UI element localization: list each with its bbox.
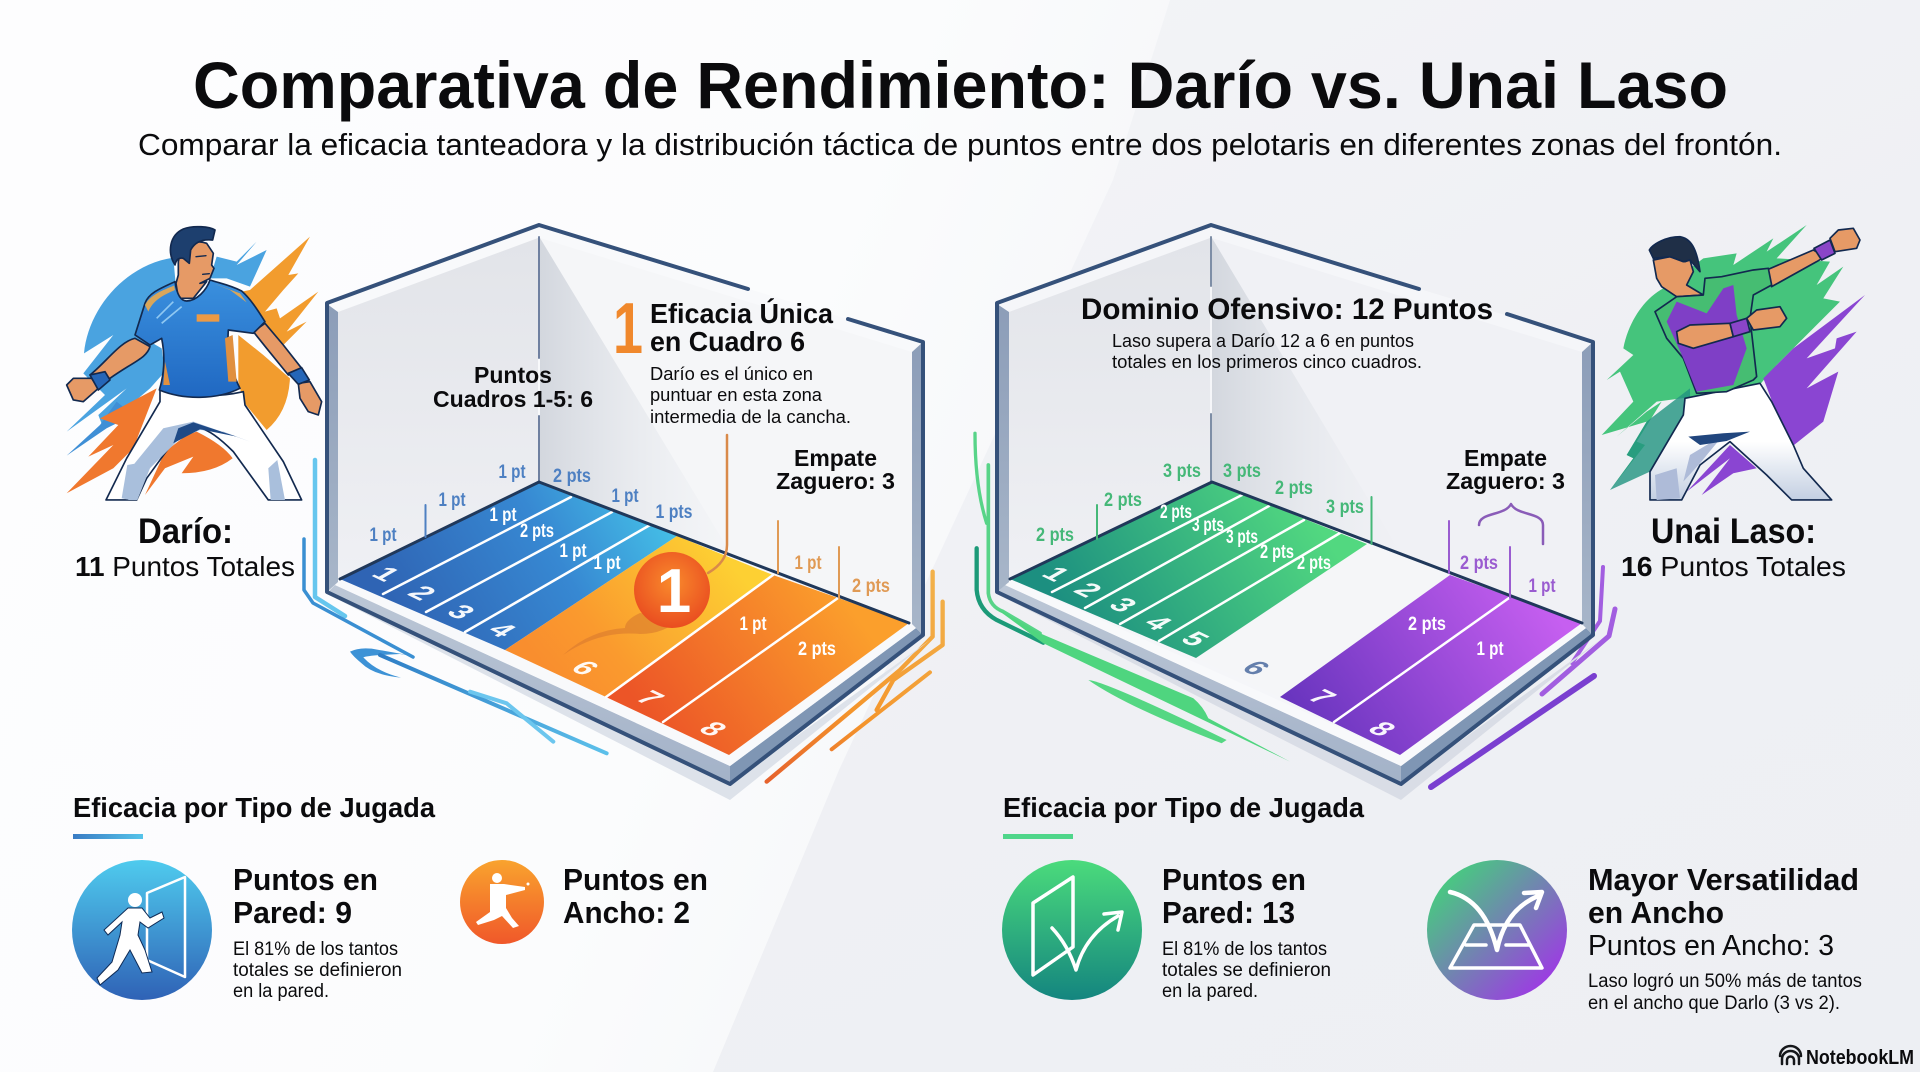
point labels on floor [1160, 502, 1504, 660]
stat: puntos en pared: El 81% de los tantos [1162, 939, 1327, 960]
icon: pared Darío [72, 860, 212, 1000]
floor numbers: 6 [1234, 657, 1277, 680]
stat: mayor versatilidad: Laso logró un 50% más de tantos [1588, 971, 1862, 992]
callout: eficacia unica: Darío es el único en [650, 364, 813, 384]
icon: versatilidad [1427, 860, 1567, 1000]
section: eficacia Laso [1002, 792, 1862, 1014]
point labels on wall: 1 pt [438, 490, 466, 511]
floor numbers: 6 [563, 657, 606, 680]
point labels on wall: 1 pt [498, 462, 526, 483]
callout: dominio ofensivo: Dominio Ofensivo: 12 Puntos [1081, 293, 1493, 326]
stat: puntos en pared: totales se definieron [1162, 960, 1331, 981]
point labels on floor: 2 pts [1260, 542, 1294, 563]
decorative speed strokes: Laso court [975, 433, 1615, 787]
court: Darío [327, 225, 930, 800]
ball: cuadro 6: 1 [657, 557, 691, 626]
floor: Darío [340, 482, 909, 755]
callout: puntos cuadros 1-5 [433, 362, 593, 412]
point labels on wall: 2 pts [1460, 553, 1498, 574]
point labels on floor: 3 pts [1226, 527, 1258, 548]
point labels on floor [490, 505, 836, 660]
floor numbers: 5 [1173, 628, 1216, 651]
icon: ancho Darío [460, 860, 544, 944]
point labels on wall: 2 pts [1036, 525, 1074, 546]
decorative speed strokes: Darío court [304, 460, 943, 782]
point labels on floor: 2 pts [520, 521, 554, 542]
icon: pared Laso [1002, 860, 1142, 1000]
point labels on floor: 1 pt [594, 553, 621, 574]
floor numbers [1034, 563, 1403, 741]
point labels on wall: 3 pts [1223, 461, 1261, 482]
callout: empate zaguero: Empate [794, 445, 877, 471]
point labels on wall: 3 pts [1163, 461, 1201, 482]
floor numbers: 8 [1360, 718, 1403, 741]
floor numbers: 3 [1101, 594, 1144, 617]
point labels on floor: 2 pts [1408, 614, 1446, 635]
name: Unai Laso: Unai Laso: [1651, 512, 1816, 551]
callout: empate zaguero [776, 445, 895, 494]
callout: eficacia unica: intermedia de la cancha. [650, 407, 851, 427]
athlete: Unai Laso [1602, 225, 1865, 500]
stat: puntos en pared: Puntos en [233, 862, 378, 897]
section: eficacia Darío: Eficacia por Tipo de Jugada [73, 792, 435, 823]
athlete: Darío [67, 227, 322, 500]
name: Darío [75, 512, 295, 582]
callout: eficacia unica: en Cuadro 6 [650, 326, 805, 357]
stat: puntos en pared: en la pared. [233, 981, 329, 1002]
callout: puntos cuadros 1-5: Puntos [474, 362, 552, 388]
floor numbers [364, 563, 734, 741]
stat: puntos en ancho [563, 862, 708, 930]
callout: empate zaguero [1446, 445, 1565, 544]
section: eficacia Laso: Eficacia por Tipo de Jugada [1003, 792, 1364, 823]
subtitle: Comparar la eficacia tanteadora y la distribución táctica de puntos entre dos pelotaris en diferentes zonas del frontón. [138, 127, 1782, 162]
point labels on wall [370, 462, 890, 598]
point labels on floor: 1 pt [490, 505, 517, 526]
name: Darío: 11 Puntos Totales [75, 551, 295, 582]
name: Unai Laso: 16 Puntos Totales [1621, 551, 1846, 582]
point labels on wall: 2 pts [1104, 490, 1142, 511]
floor numbers: 2 [1066, 579, 1109, 602]
name: Unai Laso [1621, 512, 1846, 582]
point labels on wall: 1 pts [656, 502, 692, 523]
callout: empate zaguero: Empate [1464, 445, 1547, 471]
stat: mayor versatilidad [1588, 862, 1862, 1014]
stat: puntos en pared: totales se definieron [233, 960, 402, 981]
point labels on floor: 2 pts [1160, 502, 1192, 523]
point labels on wall: 2 pts [852, 576, 890, 597]
stat: mayor versatilidad: en el ancho que Darlo (3 vs 2). [1588, 993, 1840, 1014]
point labels on wall: 1 pt [612, 486, 639, 507]
point labels on floor: 1 pt [560, 541, 587, 562]
floor numbers: 1 [1034, 563, 1077, 586]
stat: puntos en pared: El 81% de los tantos [233, 939, 398, 960]
stat: puntos en ancho: Puntos en [563, 862, 708, 897]
callout: dominio ofensivo: Laso supera a Darío 12 a 6 en puntos [1112, 331, 1414, 351]
stat: puntos en pared: Pared: 13 [1162, 895, 1295, 930]
callout: empate zaguero: Zaguero: 3 [776, 468, 895, 494]
callout: empate zaguero: Zaguero: 3 [1446, 468, 1565, 494]
floor numbers: 2 [400, 582, 443, 605]
floor numbers: 4 [1136, 612, 1179, 635]
name: Darío: Darío: [138, 512, 233, 551]
floor numbers: 7 [1300, 686, 1343, 709]
point labels on wall: 1 pt [1528, 576, 1556, 597]
stat: mayor versatilidad: Mayor Versatilidad [1588, 862, 1859, 897]
stat: puntos en pared [233, 862, 402, 1002]
point labels on wall: 1 pt [794, 553, 822, 574]
callout: eficacia unica [613, 289, 851, 427]
stat: mayor versatilidad: en Ancho [1588, 895, 1724, 930]
point labels on wall: 2 pts [553, 466, 591, 487]
floor numbers: 1 [364, 563, 407, 586]
callout: eficacia unica: puntuar en esta zona [650, 385, 823, 405]
stat: puntos en pared: Puntos en [1162, 862, 1306, 897]
callout: dominio ofensivo: totales en los primeros cinco cuadros. [1112, 352, 1422, 372]
point labels on floor: 3 pts [1192, 515, 1224, 536]
ball: cuadro 6 [563, 435, 727, 655]
floor: Unai Laso [1010, 482, 1582, 755]
floor numbers: 8 [691, 718, 734, 741]
callout: eficacia unica: 1 [613, 289, 643, 369]
stat: puntos en ancho: Ancho: 2 [563, 895, 690, 930]
point labels on floor: 1 pt [740, 614, 767, 635]
callout: puntos cuadros 1-5: Cuadros 1-5: 6 [433, 386, 593, 412]
point labels on wall [1036, 461, 1556, 598]
floor numbers: 3 [439, 601, 482, 624]
callout: dominio ofensivo [1081, 293, 1493, 372]
point labels on floor: 1 pt [1476, 639, 1504, 660]
callout: eficacia unica: Eficacia Única [650, 298, 833, 329]
floor numbers: 4 [480, 619, 523, 642]
title: Comparativa de Rendimiento: Darío vs. Unai Laso [193, 48, 1728, 122]
stat: mayor versatilidad: Puntos en Ancho: 3 [1588, 930, 1834, 962]
floor numbers: 7 [628, 687, 671, 710]
point labels on wall: 1 pt [370, 525, 397, 546]
court: Unai Laso [997, 225, 1600, 800]
point labels on floor: 2 pts [798, 639, 836, 660]
section: eficacia Darío [72, 792, 708, 1002]
point labels on wall: 2 pts [1275, 478, 1313, 499]
stat: puntos en pared: en la pared. [1162, 981, 1258, 1002]
stat: puntos en pared: Pared: 9 [233, 895, 352, 930]
stat: puntos en pared [1162, 862, 1331, 1002]
point labels on wall: 3 pts [1326, 497, 1364, 518]
point labels on floor: 2 pts [1297, 553, 1331, 574]
